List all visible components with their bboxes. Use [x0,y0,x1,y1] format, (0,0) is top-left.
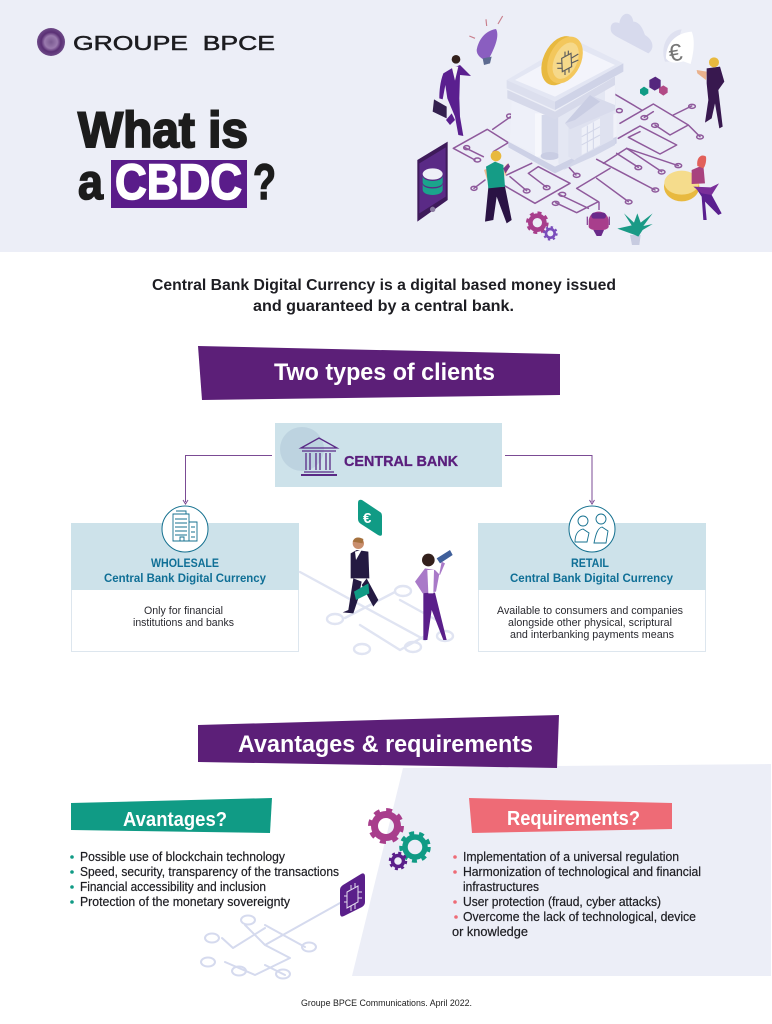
panel: retail CBDC: Available to consumers and companies [497,605,683,617]
icon: green euro tag: € [363,510,372,527]
panel: retail CBDC: RETAIL [571,556,609,570]
cloud [611,14,652,53]
phone with database icon [417,142,448,222]
sub-heading: Avantages? [71,798,272,833]
panel: central bank: CENTRAL BANK [344,453,458,470]
footer credit: Groupe BPCE Communications. April 2022. [301,998,472,1008]
sub-heading: Requirements?: Requirements? [507,808,640,830]
panel: central bank [275,423,502,487]
person: man on phone [433,55,471,136]
cubes [640,77,668,96]
speech bubble with euro [663,29,694,68]
person: businessman with briefcase [343,537,378,613]
panel: retail CBDC: Central Bank Digital Currency [510,571,673,585]
list: requirements: Implementation of a universal regulation [463,850,679,864]
panel: retail CBDC: alongside other physical, scriptural [508,617,672,629]
intro text [152,277,616,315]
title: What is a CBDC?: What is [78,102,248,158]
title: What is a CBDC?: a [78,154,104,210]
panel: retail CBDC: and interbanking payments means [510,629,674,641]
heading banner: Avantages & requirements [198,715,559,768]
list: requirements: Harmonization of technological and financial [463,865,701,879]
illustration: bank and digital circuit [417,14,724,245]
title: What is a CBDC? [78,102,276,210]
arrow: central bank to wholesale [183,456,272,504]
heading banner: Avantages & requirements: Avantages & requirements [238,731,533,758]
person: man in green [484,151,512,223]
coin with chip [534,30,590,91]
person: woman with megaphone [415,550,453,640]
arrow: central bank to retail [505,456,594,504]
list: advantages: Possible use of blockchain technology [80,850,286,864]
panel: header background [0,0,772,252]
list: requirements [452,850,701,939]
panel: lavender requirements background [352,764,771,976]
panel: wholesale CBDC: Only for financial [144,605,223,617]
list: requirements: or knowledge [452,925,528,939]
logo: Groupe BPCE [37,28,275,56]
title: What is a CBDC?: ? [253,154,276,210]
list: requirements: User protection (fraud, cyber attacks) [463,895,661,909]
icon: gears [370,810,429,869]
icon: green euro tag [358,500,382,536]
icon: bank [301,438,337,475]
sub-heading: Requirements? [469,798,672,833]
icon: two people [569,506,615,552]
logo: Groupe BPCE: GROUPE BPCE [73,33,275,55]
lightbulb [469,16,503,65]
icon: buildings [162,506,208,552]
panel: retail CBDC [478,506,706,652]
heading banner: Two types of clients [198,346,560,400]
person: woman standing [697,57,724,128]
list: advantages [70,850,339,909]
speech bubble with euro: € [667,39,684,68]
list: advantages: Protection of the monetary sovereignty [80,895,291,909]
title: What is a CBDC?: CBDC [115,154,242,210]
heading banner: Two types of clients: Two types of clients [274,359,495,386]
circuit lines [453,93,703,213]
panel: wholesale CBDC: Central Bank Digital Currency [104,571,266,585]
illustration: pale circuit behind people [300,572,453,654]
person: woman with coin and laptop [664,155,722,220]
sub-heading: Avantages?: Avantages? [123,809,227,831]
plant [617,213,653,245]
gears [527,213,557,240]
panel: wholesale CBDC [71,506,299,652]
bank building [507,40,623,173]
list: advantages: Financial accessibility and inclusion [80,880,266,894]
list: requirements: Overcome the lack of technological, device [463,910,696,924]
icon: chip tag [340,873,365,917]
list: advantages: Speed, security, transparency of the transactions [80,865,339,879]
panel: wholesale CBDC: WHOLESALE [151,556,219,570]
panel: wholesale CBDC: institutions and banks [133,617,234,629]
intro text: and guaranteed by a central bank. [253,298,514,315]
robot [587,202,609,236]
intro text: Central Bank Digital Currency is a digital based money issued [152,277,616,294]
illustration: pale circuit with chip tag [201,873,365,978]
list: requirements: infrastructures [463,880,539,894]
